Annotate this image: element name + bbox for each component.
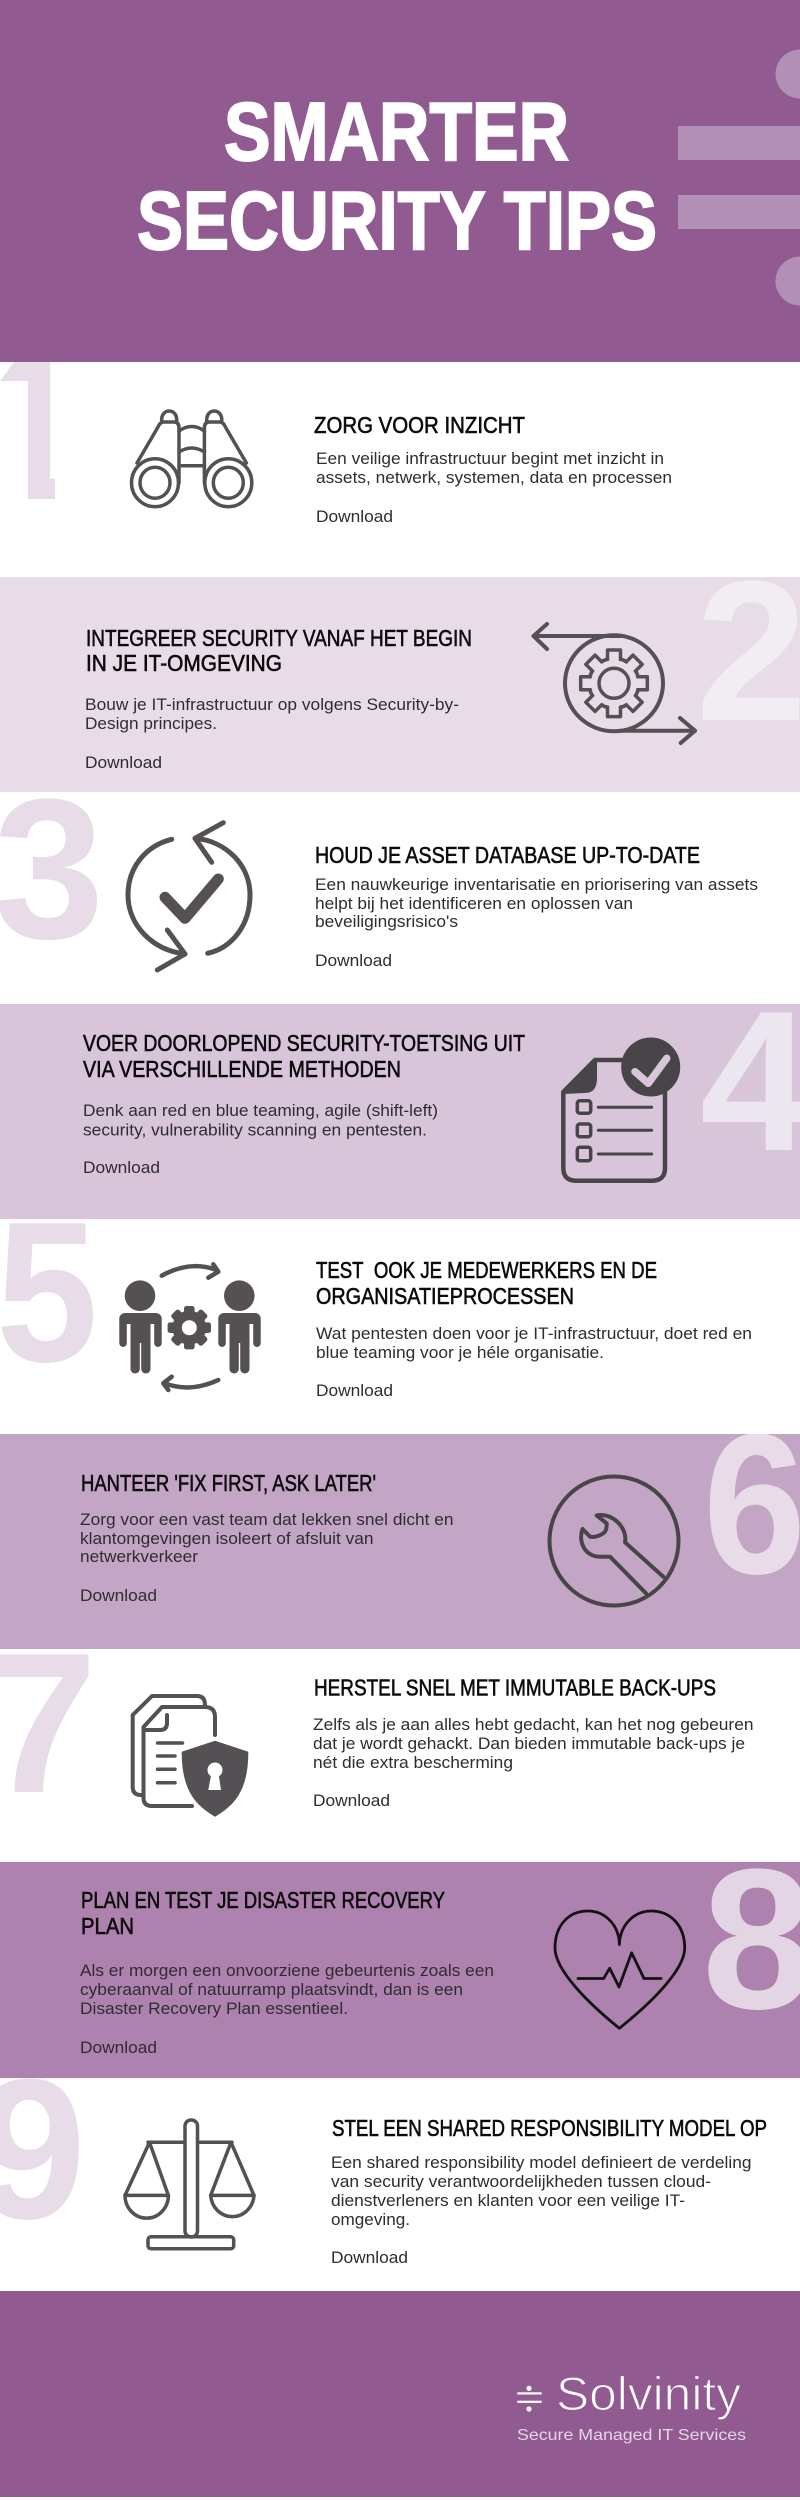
heading <box>81 1887 445 1939</box>
panel: step 7 <box>0 1654 752 1817</box>
text block: nét die extra bescherming <box>313 1753 513 1772</box>
text block: Een veilige infrastructuur begint met inzicht in <box>316 449 664 468</box>
text block: assets, netwerk, systemen, data en processen <box>316 468 672 487</box>
download link: Download <box>83 1158 160 1177</box>
icon: wrench <box>550 1476 678 1606</box>
panel: step 1 <box>0 362 671 522</box>
panel: step 8 <box>0 1862 800 2078</box>
heading: IN JE IT-OMGEVING <box>86 650 282 676</box>
icon: scales <box>125 2120 254 2249</box>
icon: heart with pulse <box>555 1911 685 2028</box>
panel: step 3 <box>0 798 758 972</box>
download link: Download <box>315 951 392 970</box>
tagline: Secure Managed IT Services <box>517 2427 746 2444</box>
text block <box>315 875 758 931</box>
logo mark <box>517 2386 542 2412</box>
download link: Download <box>316 507 393 526</box>
text block <box>313 1715 754 1772</box>
download link: Download <box>80 2038 157 2057</box>
title: SECURITY TIPS <box>137 174 657 267</box>
text block: klantomgevingen isoleert of afsluit van <box>80 1529 374 1548</box>
text block: Bouw je IT-infrastructuur op volgens Security-by- <box>85 695 459 714</box>
text block: dat je wordt gehackt. Dan bieden immutable back-ups je <box>313 1734 745 1753</box>
download link: Download <box>80 1586 157 1605</box>
decorative logo mark <box>678 50 800 306</box>
heading: TEST OOK JE MEDEWERKERS EN DE <box>316 1257 657 1283</box>
heading: VOER DOORLOPEND SECURITY-TOETSING UIT <box>83 1030 525 1056</box>
text block: cyberaanval of natuurramp plaatsvindt, dan is een <box>80 1980 463 1999</box>
icon: people and gear <box>119 1264 261 1390</box>
heading: HOUD JE ASSET DATABASE UP-TO-DATE <box>315 842 700 868</box>
heading: PLAN EN TEST JE DISASTER RECOVERY <box>81 1887 445 1913</box>
title: SMARTER <box>224 85 569 178</box>
heading: INTEGREER SECURITY VANAF HET BEGIN <box>86 625 472 651</box>
panel: step 9 <box>0 2078 766 2263</box>
heading: HERSTEL SNEL MET IMMUTABLE BACK-UPS <box>314 1674 716 1700</box>
text block: Als er morgen een onvoorziene gebeurtenis zoals een <box>80 1961 494 1980</box>
text block <box>316 1324 752 1362</box>
text block: Denk aan red en blue teaming, agile (shift-left) <box>83 1101 438 1120</box>
download link: Download <box>85 753 162 772</box>
number 1 <box>0 362 55 499</box>
text block: Een shared responsibility model definieert de verdeling <box>331 2153 752 2172</box>
text block: van security verantwoordelijkheden tussen cloud- <box>331 2172 711 2191</box>
heading <box>316 1257 657 1309</box>
icon: binoculars <box>132 411 252 507</box>
text block: blue teaming voor je héle organisatie. <box>316 1343 604 1362</box>
text block: Zorg voor een vast team dat lekken snel dicht en <box>80 1510 454 1529</box>
heading <box>83 1030 525 1082</box>
download link: Download <box>313 1791 390 1810</box>
text block <box>316 449 672 487</box>
logo wordmark: Solvinity <box>556 2367 742 2420</box>
heading <box>86 625 472 676</box>
text block: security, vulnerability scanning en pentesten. <box>83 1120 427 1140</box>
panel: step 4 <box>0 1004 800 1219</box>
panel: header <box>0 0 800 362</box>
download link: Download <box>331 2248 408 2267</box>
text block: Zelfs als je aan alles hebt gedacht, kan het nog gebeuren <box>313 1715 754 1734</box>
heading: ZORG VOOR INZICHT <box>314 412 525 438</box>
text block: dienstverleners en klanten voor een veilige IT- <box>331 2191 685 2210</box>
panel: step 6 <box>0 1434 800 1649</box>
text block <box>83 1101 438 1140</box>
download link: Download <box>316 1381 393 1400</box>
heading: VIA VERSCHILLENDE METHODEN <box>83 1056 401 1082</box>
text block: Disaster Recovery Plan essentieel. <box>80 1999 348 2018</box>
text block <box>85 695 459 733</box>
icon: documents and shield <box>133 1696 248 1817</box>
text block: netwerkverkeer <box>80 1547 198 1566</box>
title <box>137 85 657 267</box>
text block: Design principes. <box>85 714 217 733</box>
icon: gear with arrows <box>534 624 695 743</box>
panel: step 2 <box>0 577 800 792</box>
heading: ORGANISATIEPROCESSEN <box>316 1283 574 1309</box>
panel: step 5 <box>2 1223 751 1396</box>
icon: checklist <box>563 1040 678 1181</box>
text block <box>80 1510 454 1566</box>
text block: Een nauwkeurige inventarisatie en priorisering van assets <box>315 875 758 894</box>
text block <box>80 1961 494 2018</box>
text block: helpt bij het identificeren en oplossen van <box>315 894 633 913</box>
heading: HANTEER 'FIX FIRST, ASK LATER' <box>81 1470 376 1496</box>
heading: PLAN <box>81 1913 134 1939</box>
text block: beveiligingsrisico's <box>315 912 458 931</box>
icon: refresh check <box>128 823 250 970</box>
text block: omgeving. <box>331 2210 410 2229</box>
panel: footer <box>0 2291 800 2497</box>
text block: Wat pentesten doen voor je IT-infrastructuur, doet red en <box>316 1324 752 1343</box>
text block <box>331 2153 752 2229</box>
